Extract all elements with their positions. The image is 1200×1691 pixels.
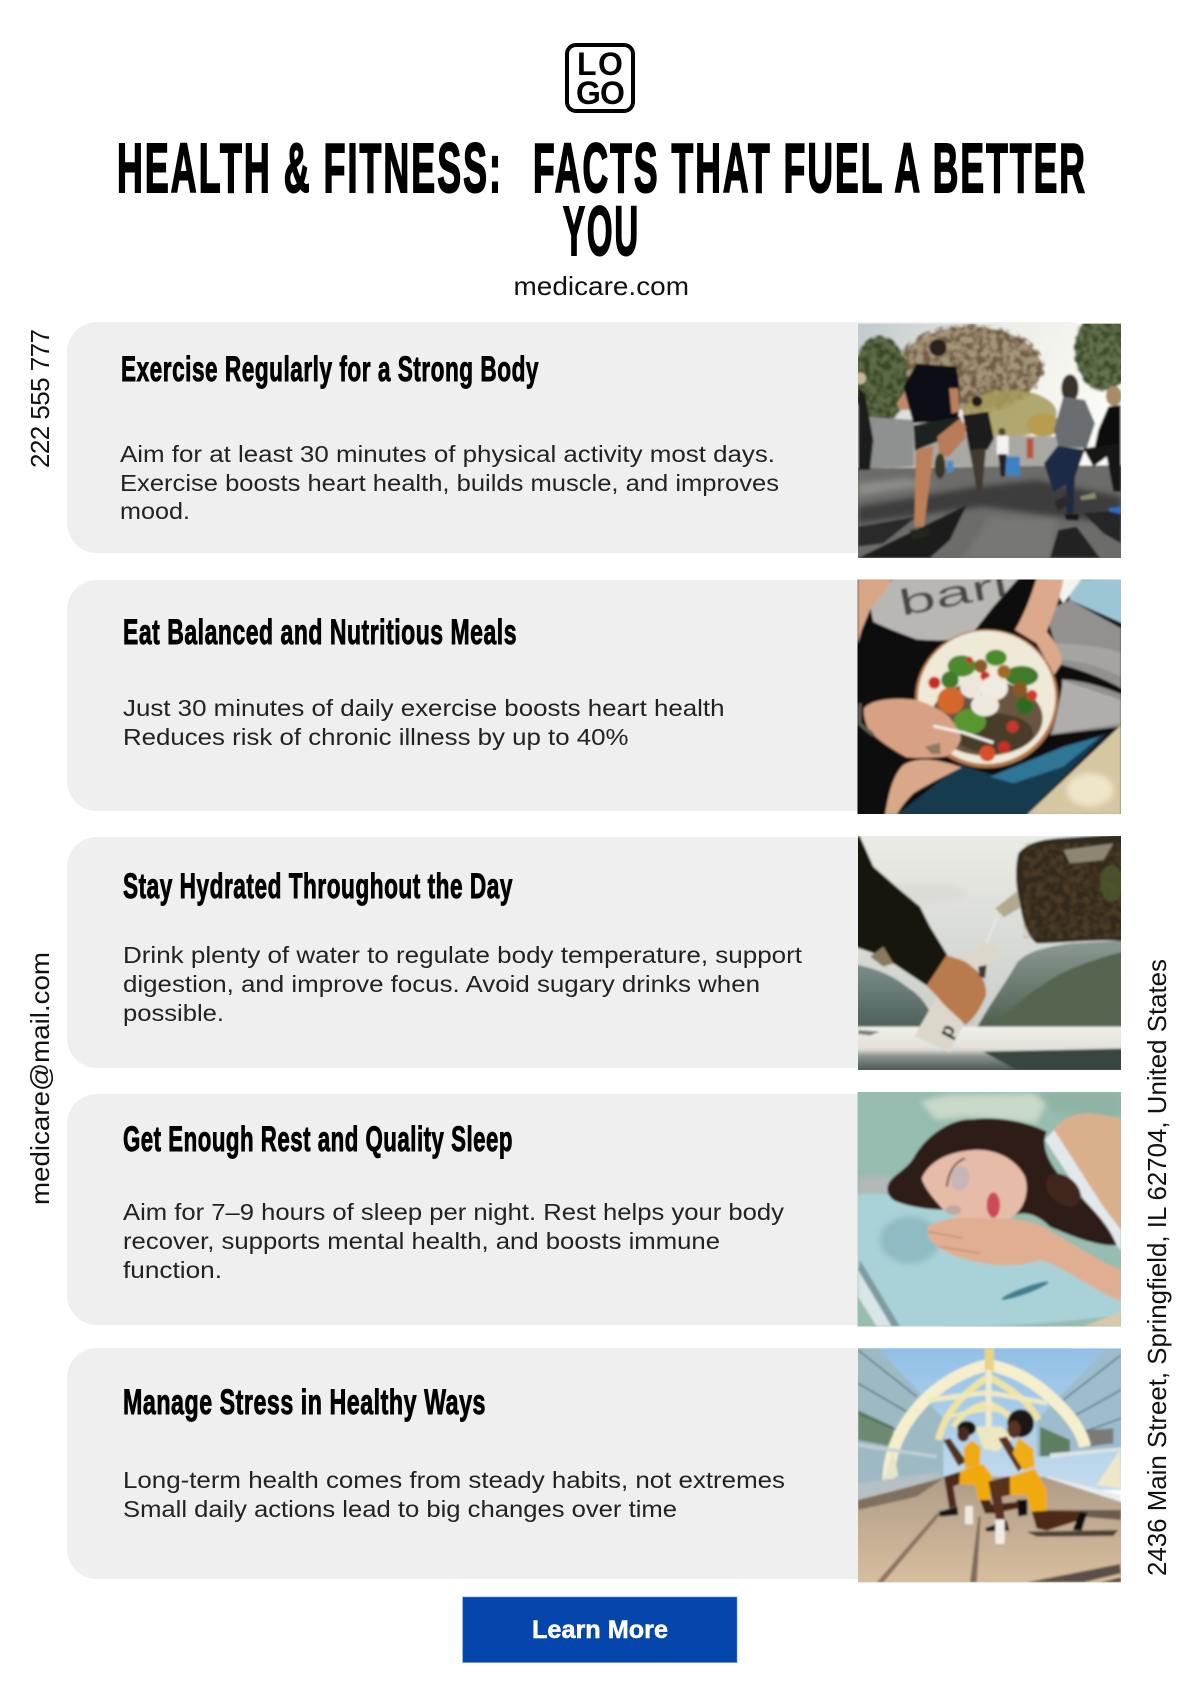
title: YOU [563,192,640,270]
body: hydration: digestion, and improve focus. Avoid sugary drinks when [123,971,760,997]
heading: hydration: Stay Hydrated Throughout the Day [123,867,513,906]
heading: exercise: Exercise Regularly for a Strong Body [121,350,539,389]
body: sleep: function. [123,1257,222,1283]
photo: bowl of healthy food: bari [895,563,1011,624]
body: hydration: Drink plenty of water to regulate body temperature, support [123,942,803,968]
heading: stress: Manage Stress in Healthy Ways [123,1383,486,1422]
body: stress: Long-term health comes from steady habits, not extremes [123,1467,785,1493]
logo: LO [577,46,623,82]
body: sleep [123,1199,784,1283]
body: exercise: Exercise boosts heart health, builds muscle, and improves [120,470,779,496]
man centre [997,436,1009,455]
panel: sleep [67,1087,1130,1333]
body: meals: Reduces risk of chronic illness by up to 40% [123,724,629,750]
address (vertical): 2436 Main Street, Springfield, IL 62704, United States [1142,959,1172,1576]
logo [567,45,633,111]
right person [1106,386,1122,406]
panel: hydration [67,830,1130,1072]
photo: two women lunging on a bridge [850,1343,1130,1587]
panel: meals [67,563,1130,820]
man front [929,339,947,356]
photo: filling water bottle: p [935,1021,960,1042]
body: meals [123,695,724,750]
email (vertical): medicare@mail.com [25,952,55,1205]
body: stress [123,1467,785,1522]
body: meals: Just 30 minutes of daily exercise boosts heart health [123,695,724,721]
panel: exercise [67,308,1133,563]
woman [1061,374,1079,402]
body: exercise [120,441,779,524]
button: learn more [463,1597,737,1662]
body: stress: Small daily actions lead to big changes over time [123,1496,677,1522]
heading: meals: Eat Balanced and Nutritious Meals [123,613,517,652]
body: hydration [123,942,803,1026]
photo: bowl of healthy food [858,580,1121,814]
heading: sleep: Get Enough Rest and Quality Sleep [123,1120,513,1159]
body: exercise: mood. [120,498,190,524]
woman front [1007,1409,1034,1437]
website: medicare.com [514,271,689,301]
body: sleep: Aim for 7–9 hours of sleep per night. Rest helps your body [123,1199,784,1225]
left person [858,388,873,470]
button: learn more: Learn More [532,1616,668,1644]
panel: stress [67,1343,1130,1587]
title [117,129,1087,270]
body: sleep: recover, supports mental health, and boosts immune [123,1228,720,1254]
phone number (vertical): 222 555 777 [25,329,55,468]
body: exercise: Aim for at least 30 minutes of physical activity most days. [120,441,775,467]
woman back [957,1421,976,1436]
photo: filling water bottle [850,830,1130,1072]
photo: group running exercise [858,324,1121,558]
photo: woman sleeping [858,1092,1121,1326]
logo: GO [576,75,625,111]
body: hydration: possible. [123,1000,224,1026]
title: HEALTH & FITNESS: [117,129,503,207]
